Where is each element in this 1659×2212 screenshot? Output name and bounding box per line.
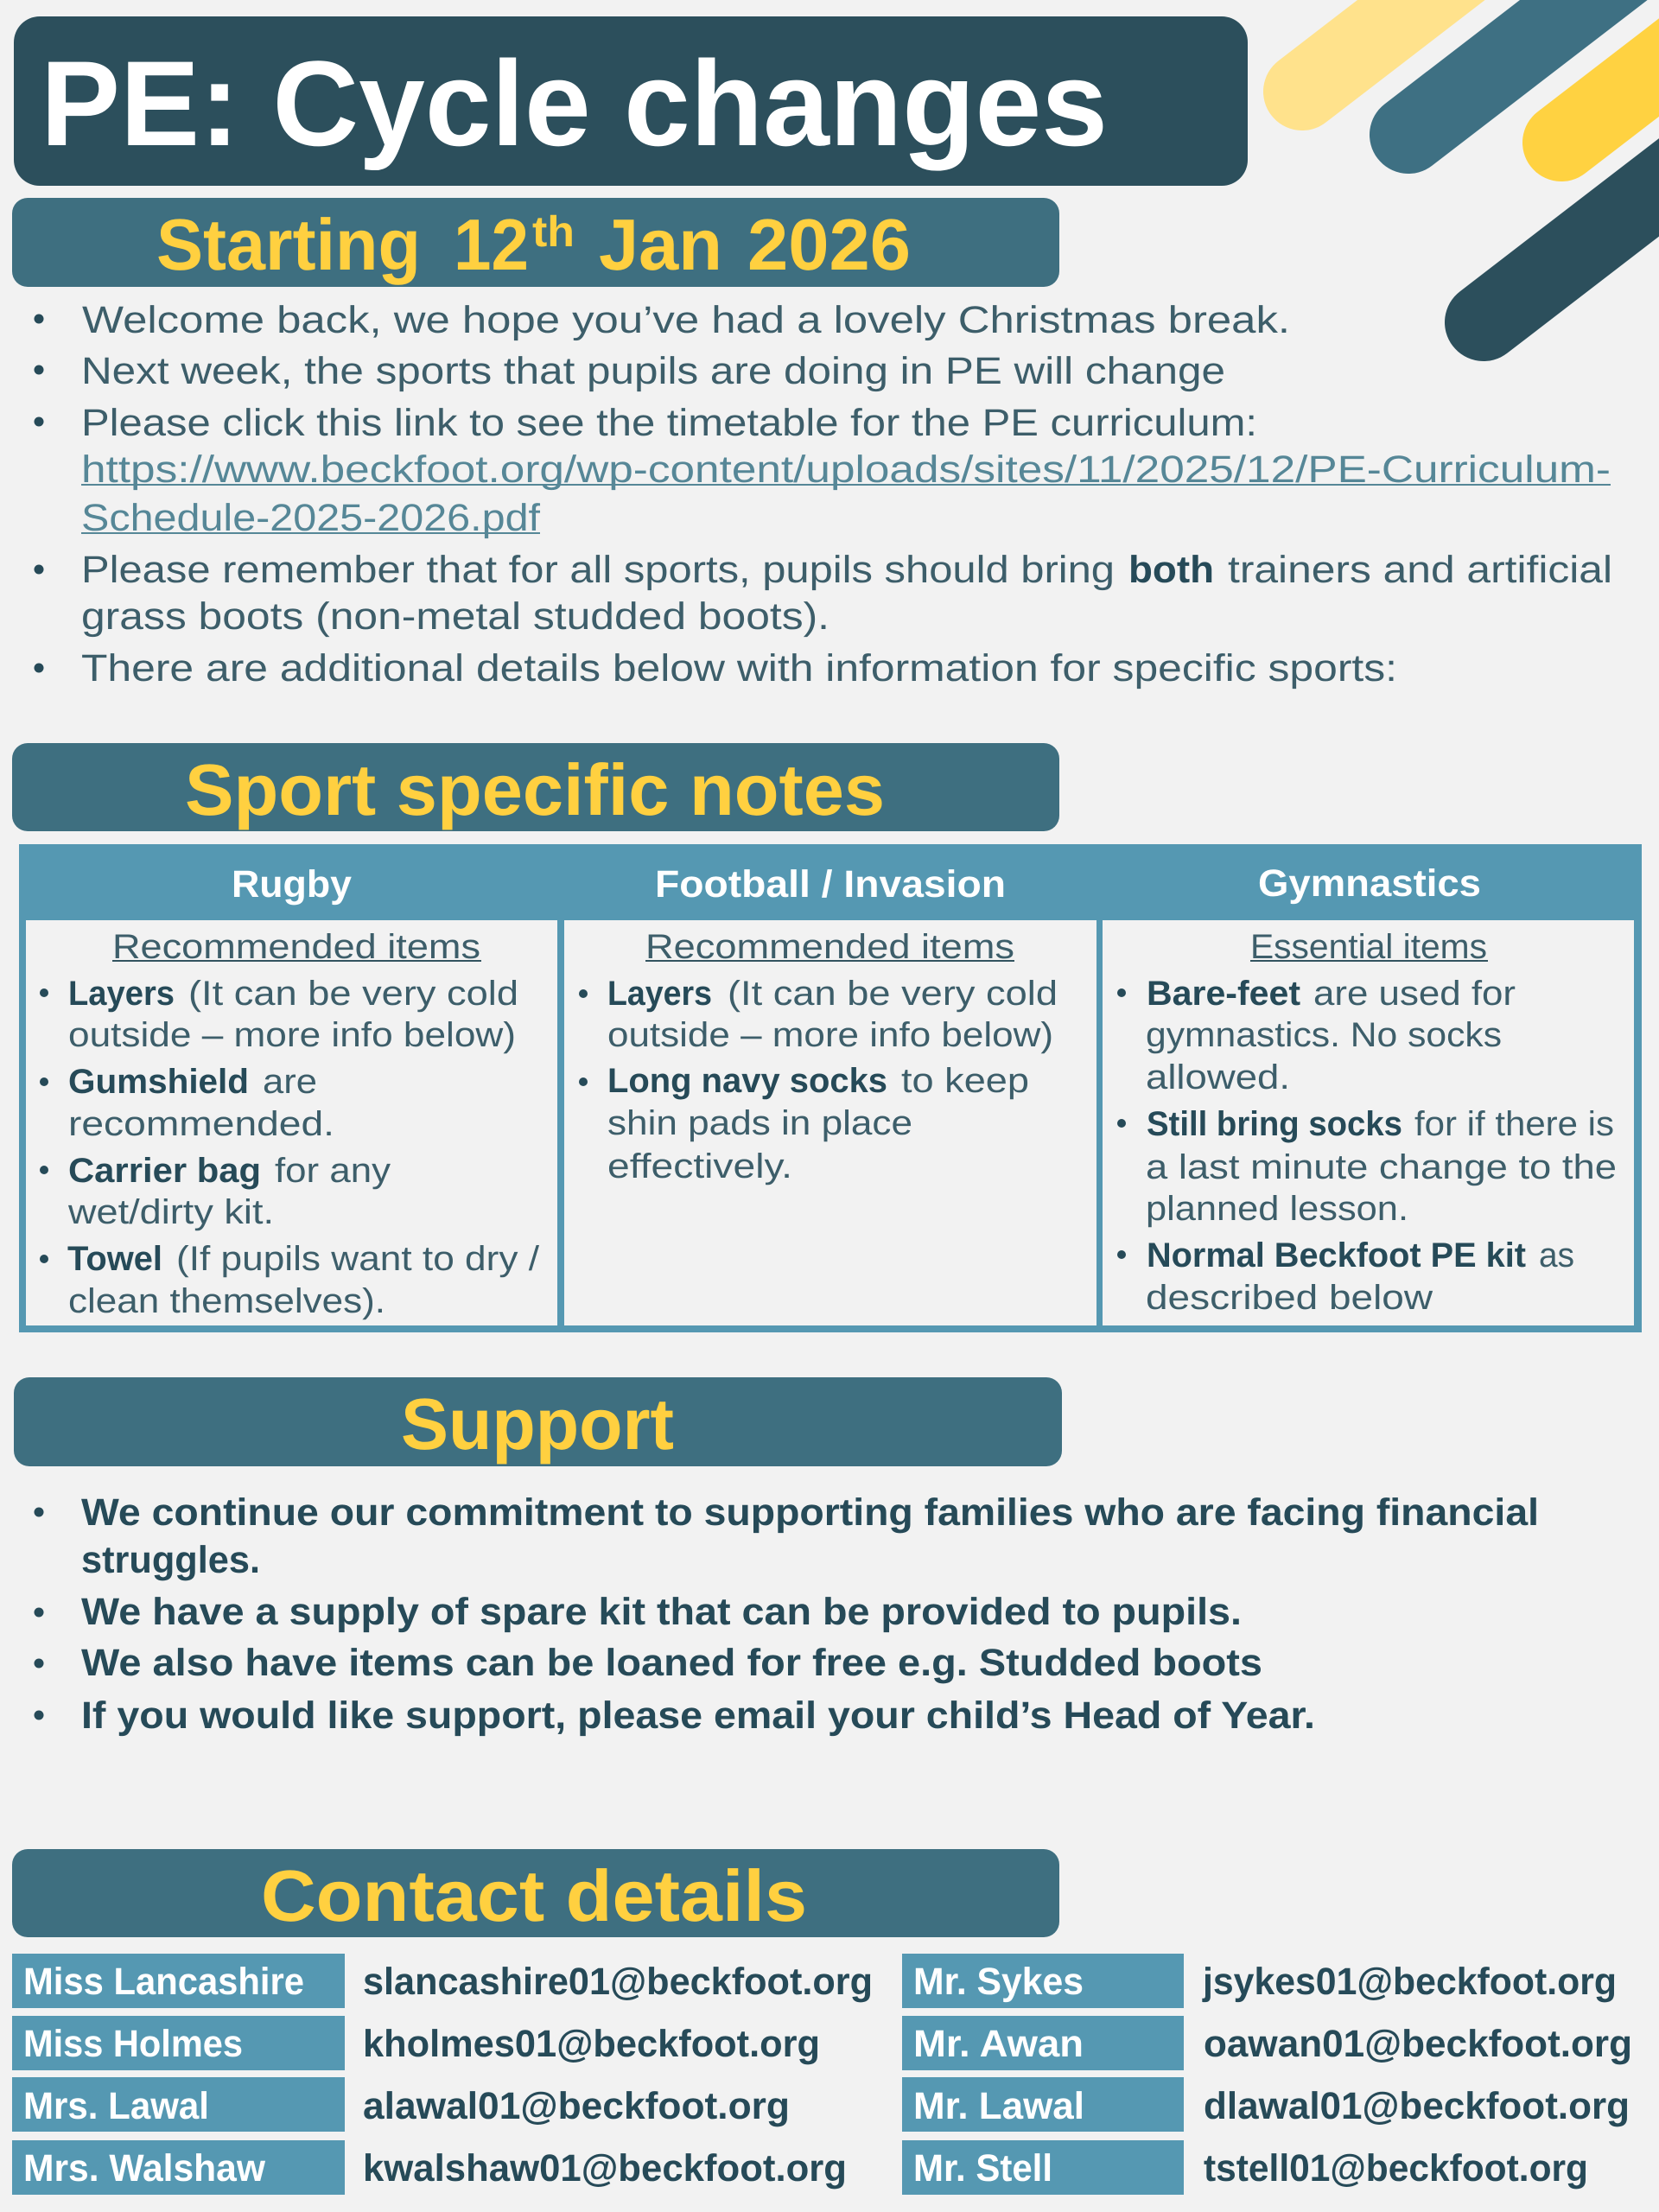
panel: gymnastics: Normal Beckfoot PE kit: [1147, 1236, 1526, 1274]
decorative diagonal stripes: [1302, 0, 1659, 322]
panel: football / invasion: effectively.: [607, 1147, 792, 1185]
heading: contact details: [12, 1849, 1059, 1937]
title banner: PE: Cycle changes: [41, 35, 1108, 171]
panel: gymnastics: Bare-feet: [1147, 975, 1300, 1013]
contact: Mrs. Walshaw: Mrs. Walshaw: [23, 2147, 266, 2190]
contact: Mr. Awan: [902, 2016, 1632, 2070]
contact: Mr. Lawal: [902, 2077, 1630, 2132]
panel: rugby: wet/dirty kit.: [67, 1193, 274, 1231]
panel: gymnastics: for if there is: [1414, 1105, 1614, 1143]
panel: rugby: Rugby: [232, 863, 353, 906]
intro bullet list: Please remember that for all sports, pupils should bring: [81, 549, 1115, 591]
panel: football / invasion: Long navy socks: [607, 1062, 887, 1100]
panel: football / invasion: shin pads in place: [607, 1104, 912, 1142]
support bullet list: We continue our commitment to supporting families who are facing financial: [81, 1491, 1539, 1534]
panel: rugby: Layers: [68, 975, 175, 1013]
intro bullet list: Next week, the sports that pupils are doing in PE will change: [81, 350, 1225, 392]
support bullet list: struggles.: [81, 1539, 260, 1581]
contact: Mrs. Lawal: alawal01@beckfoot.org: [363, 2085, 790, 2127]
panel: gymnastics: Gymnastics: [1258, 862, 1481, 905]
panel: rugby: recommended.: [68, 1105, 334, 1143]
panel: gymnastics: allowed.: [1146, 1058, 1290, 1096]
panel: football / invasion: Football / Invasion: [655, 863, 1006, 906]
heading: start date: Jan: [599, 204, 722, 285]
panel: football / invasion: (It can be very cold: [728, 975, 1058, 1013]
intro bullet list: There are additional details below with information for specific sports:: [81, 647, 1397, 690]
contact: Mr. Stell: [902, 2140, 1588, 2195]
panel: gymnastics: gymnastics. No socks: [1146, 1016, 1502, 1054]
contact: Mrs. Walshaw: kwalshaw01@beckfoot.org: [363, 2147, 847, 2190]
contact: Mr. Lawal: dlawal01@beckfoot.org: [1204, 2085, 1630, 2127]
panel: football / invasion: Layers: [607, 975, 712, 1013]
support bullet list: We have a supply of spare kit that can be provided to pupils.: [81, 1591, 1242, 1633]
panel: rugby: Gumshield: [68, 1063, 249, 1101]
heading: support: Support: [401, 1383, 674, 1465]
panel: rugby: Towel: [67, 1240, 162, 1278]
panel: gymnastics: a last minute change to the: [1146, 1148, 1617, 1186]
panel: gymnastics: [1103, 862, 1634, 1325]
heading: start date: th: [532, 207, 575, 256]
intro bullet list: [35, 299, 1612, 690]
contact: Miss Lancashire: slancashire01@beckfoot.org: [363, 1961, 873, 2003]
contact: Mr. Awan: oawan01@beckfoot.org: [1204, 2023, 1632, 2065]
intro bullet list: https://www.beckfoot.org/wp-content/uploads/sites/11/2025/12/PE-Curriculum-: [81, 448, 1611, 491]
heading: contact details: Contact details: [261, 1855, 807, 1936]
intro bullet list: grass boots (non-metal studded boots).: [81, 595, 830, 638]
panel: rugby: Carrier bag: [68, 1152, 261, 1190]
contact: Mr. Stell: tstell01@beckfoot.org: [1204, 2147, 1588, 2190]
panel: rugby: are: [263, 1063, 317, 1101]
heading: support: [14, 1377, 1062, 1466]
panel: rugby: (If pupils want to dry /: [176, 1240, 540, 1278]
heading: sport specific notes: [12, 743, 1059, 831]
panel: football / invasion: outside – more info below): [607, 1016, 1053, 1054]
intro bullet list: trainers and artificial: [1228, 549, 1612, 591]
intro bullet list: Schedule-2025-2026.pdf: [81, 497, 541, 539]
heading: sport specific notes: Sport specific notes: [185, 749, 885, 830]
contact: Mrs. Lawal: Mrs. Lawal: [23, 2085, 209, 2127]
contact: Miss Holmes: Miss Holmes: [23, 2023, 243, 2065]
heading: start date: 12: [454, 204, 529, 285]
contact: Miss Lancashire: [12, 1954, 873, 2008]
panel: rugby: [26, 863, 557, 1325]
panel: gymnastics: as: [1539, 1236, 1574, 1274]
contact: Miss Holmes: kholmes01@beckfoot.org: [363, 2023, 820, 2065]
contact: Mrs. Walshaw: [12, 2140, 847, 2195]
intro bullet list: both: [1128, 549, 1214, 591]
panel: football / invasion: Recommended items: [645, 928, 1014, 966]
heading: start date: Starting: [156, 204, 421, 285]
panel: rugby: for any: [275, 1152, 391, 1190]
panel: gymnastics: described below: [1146, 1279, 1433, 1317]
panel: sport notes table: [19, 844, 1642, 1332]
panel: gymnastics: Still bring socks: [1147, 1105, 1402, 1143]
panel: rugby: clean themselves).: [68, 1282, 385, 1320]
support bullet list: [35, 1491, 1539, 1737]
contact: Miss Lancashire: Miss Lancashire: [23, 1961, 304, 2003]
contact: Mr. Sykes: [902, 1954, 1617, 2008]
panel: rugby: Recommended items: [112, 928, 480, 966]
contact: Mr. Sykes: Mr. Sykes: [913, 1961, 1084, 2003]
panel: football / invasion: to keep: [901, 1062, 1029, 1100]
contact: Mr. Lawal: Mr. Lawal: [913, 2085, 1084, 2127]
heading: start date: 2026: [747, 204, 911, 285]
intro bullet list: Welcome back, we hope you’ve had a lovely Christmas break.: [82, 299, 1290, 341]
panel: gymnastics: planned lesson.: [1146, 1190, 1408, 1228]
contact: Mrs. Lawal: [12, 2077, 790, 2132]
contact: Mr. Awan: Mr. Awan: [913, 2023, 1084, 2065]
heading: start date: [12, 198, 1059, 287]
panel: rugby: outside – more info below): [68, 1016, 516, 1054]
panel: rugby: (It can be very cold: [188, 975, 518, 1013]
panel: football / invasion: [564, 863, 1096, 1325]
contact: Miss Holmes: [12, 2016, 820, 2070]
support bullet list: If you would like support, please email your child’s Head of Year.: [81, 1694, 1315, 1737]
contact: Mr. Stell: Mr. Stell: [913, 2147, 1052, 2190]
contact list: [12, 1954, 1632, 2195]
panel: gymnastics: are used for: [1313, 975, 1516, 1013]
support bullet list: We also have items can be loaned for free e.g. Studded boots: [81, 1642, 1262, 1684]
contact: Mr. Sykes: jsykes01@beckfoot.org: [1202, 1961, 1617, 2003]
intro bullet list: Please click this link to see the timetable for the PE curriculum:: [81, 402, 1257, 444]
panel: gymnastics: Essential items: [1250, 928, 1487, 966]
